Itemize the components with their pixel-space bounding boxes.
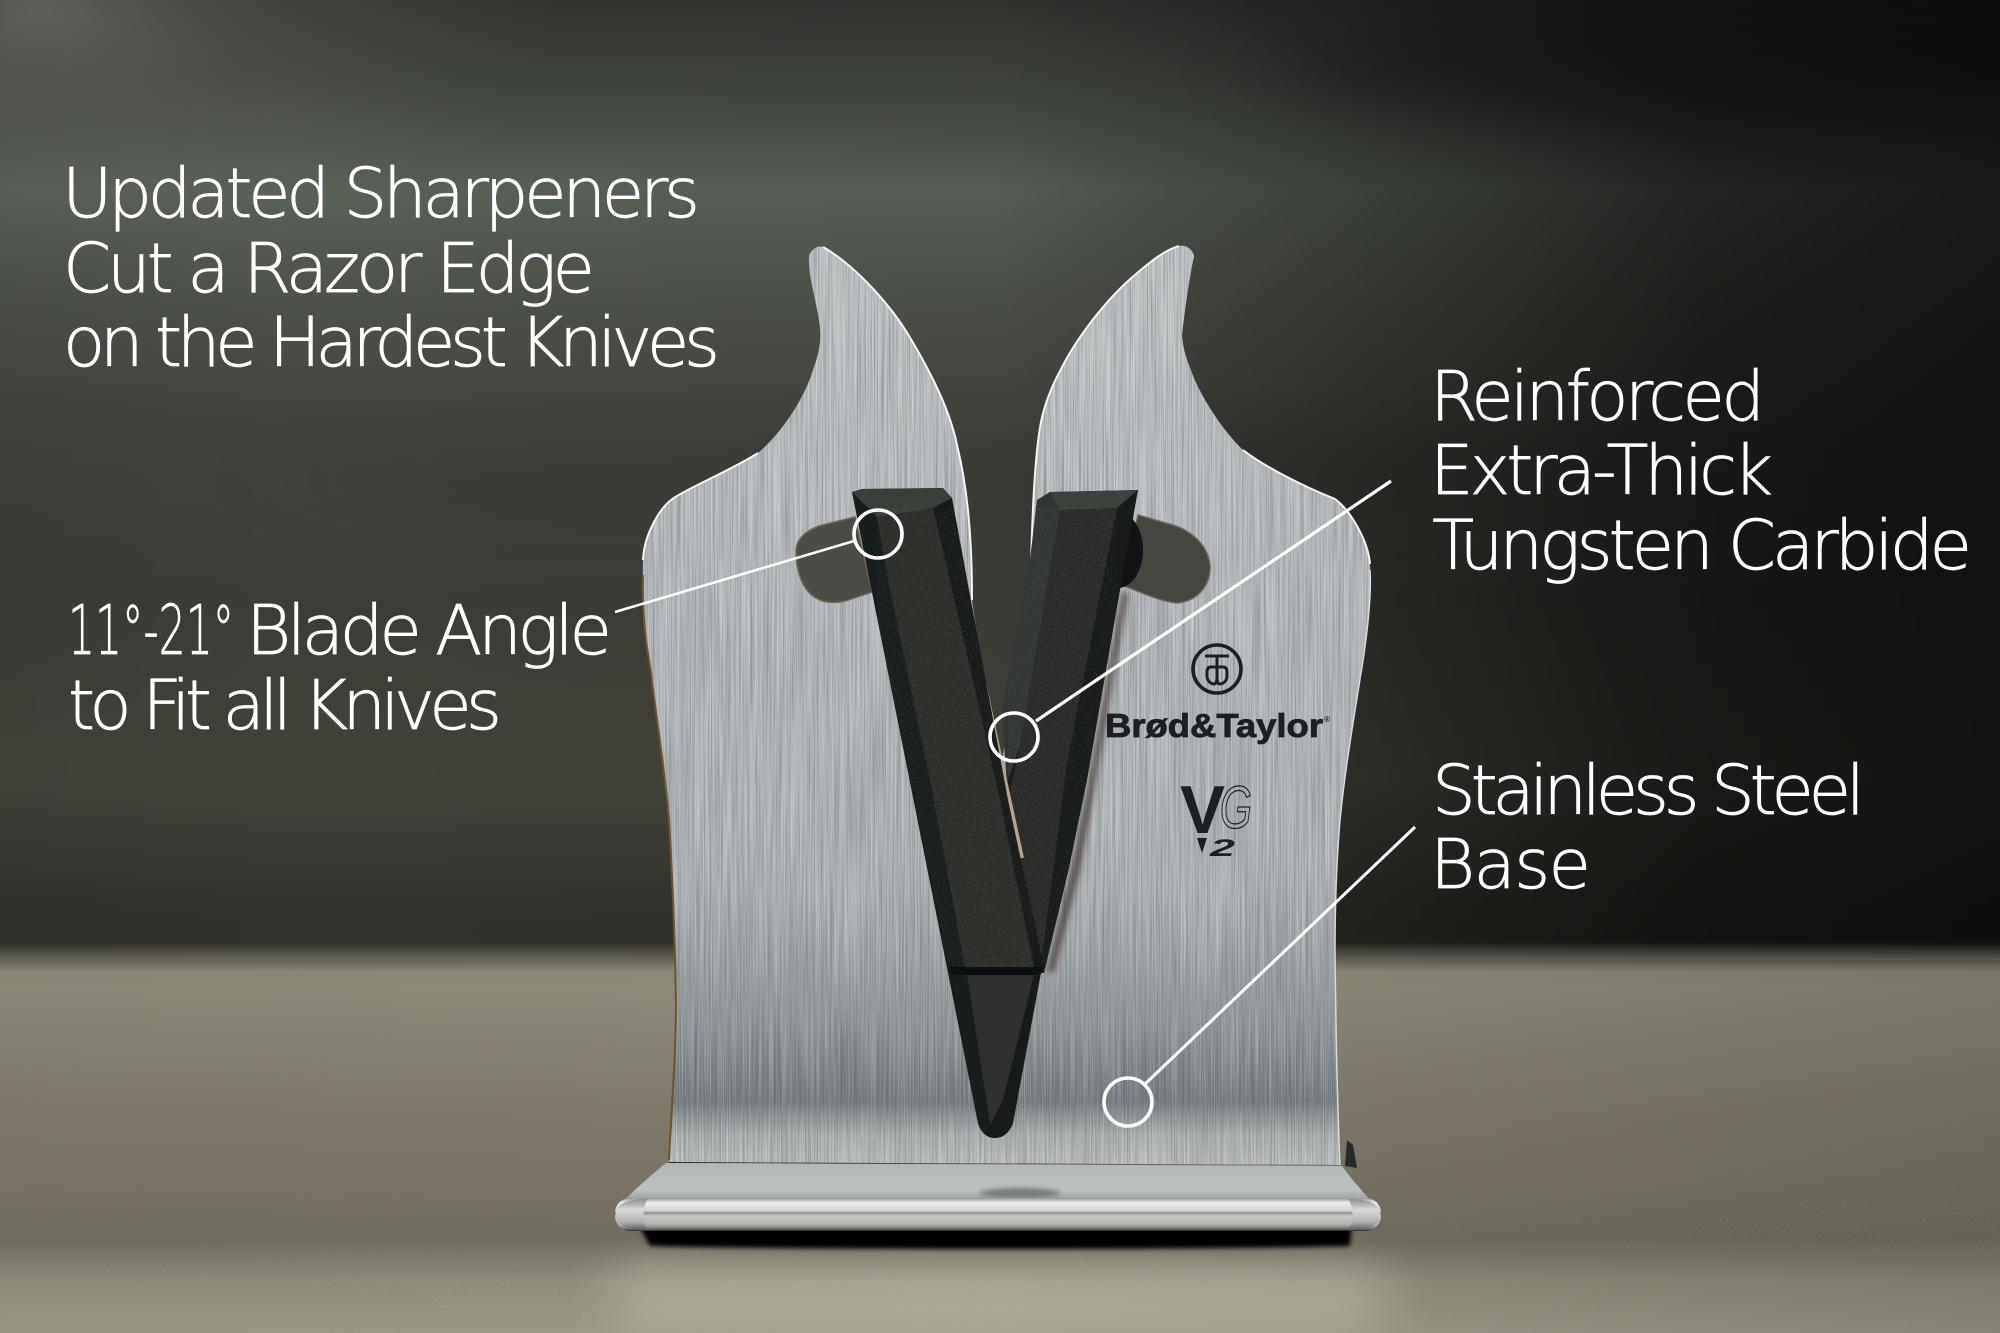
rear tab: [1345, 1140, 1357, 1168]
label text: Tungsten Carbide: [1432, 506, 1972, 586]
headline: Cut a Razor Edge: [63, 229, 595, 309]
label text: Blade Angle: [246, 591, 612, 671]
shadow beside right holder: [1047, 590, 1128, 972]
marker ring: [990, 713, 1038, 761]
left adjustment slot: [796, 517, 872, 602]
headline: on the Hardest Knives: [63, 303, 720, 383]
pivot disc behind right holder: [1093, 512, 1143, 588]
label text: [1430, 751, 1865, 905]
logo: Brod and Taylor: [1105, 645, 1330, 744]
label text: Extra-Thick: [1430, 431, 1773, 511]
sharpener: V-shaped steel body: [615, 240, 1381, 1249]
large V: V: [1180, 772, 1225, 848]
outlined G: G: [1220, 774, 1252, 841]
leader line: [1036, 481, 1391, 721]
small triangle mark: [1197, 838, 1207, 853]
label text: 11°-21°: [68, 591, 234, 671]
label text: [1430, 357, 1972, 586]
leader line: [1145, 827, 1415, 1084]
leader line: [615, 541, 854, 612]
callout: tungsten carbide: [990, 357, 1972, 761]
tan carbide sliver between holders: [982, 672, 1022, 858]
stainless steel plate with wings: [640, 240, 1375, 1170]
callout: blade angle: [68, 510, 902, 746]
label text: Reinforced: [1430, 357, 1765, 437]
headline: Updated Sharpeners: [62, 154, 700, 234]
marker ring: [1104, 1078, 1152, 1126]
base top deck: [620, 1163, 1376, 1207]
icon: circular monogram: [1193, 645, 1241, 693]
background: dark blurred wall: [0, 0, 2000, 1000]
brand name: Brød&Taylor: [1105, 707, 1323, 744]
callout: stainless steel base: [1104, 751, 1865, 1126]
small 2: 2: [1208, 835, 1236, 862]
base plate: [615, 1140, 1381, 1249]
right adjustment slot: [1122, 515, 1210, 603]
logo: V G 2: [1180, 772, 1252, 862]
label text: to Fit all Knives: [68, 666, 502, 746]
background: stone counter: [0, 942, 2000, 1333]
registered mark: ®: [1324, 715, 1330, 724]
dark reflection on deck: [980, 1188, 1060, 1198]
marker ring: [854, 510, 902, 558]
label text: [68, 591, 612, 746]
left carbide holder: [852, 488, 1044, 1138]
label text: Base: [1430, 825, 1591, 905]
base front lip: [615, 1198, 1381, 1231]
headline: [62, 154, 720, 383]
label text: Stainless Steel: [1432, 751, 1865, 831]
right rounded end cap: [1348, 1199, 1380, 1230]
left rounded end cap: [616, 1199, 648, 1230]
right carbide holder: [1000, 490, 1138, 973]
base shadow: [638, 1224, 1352, 1249]
